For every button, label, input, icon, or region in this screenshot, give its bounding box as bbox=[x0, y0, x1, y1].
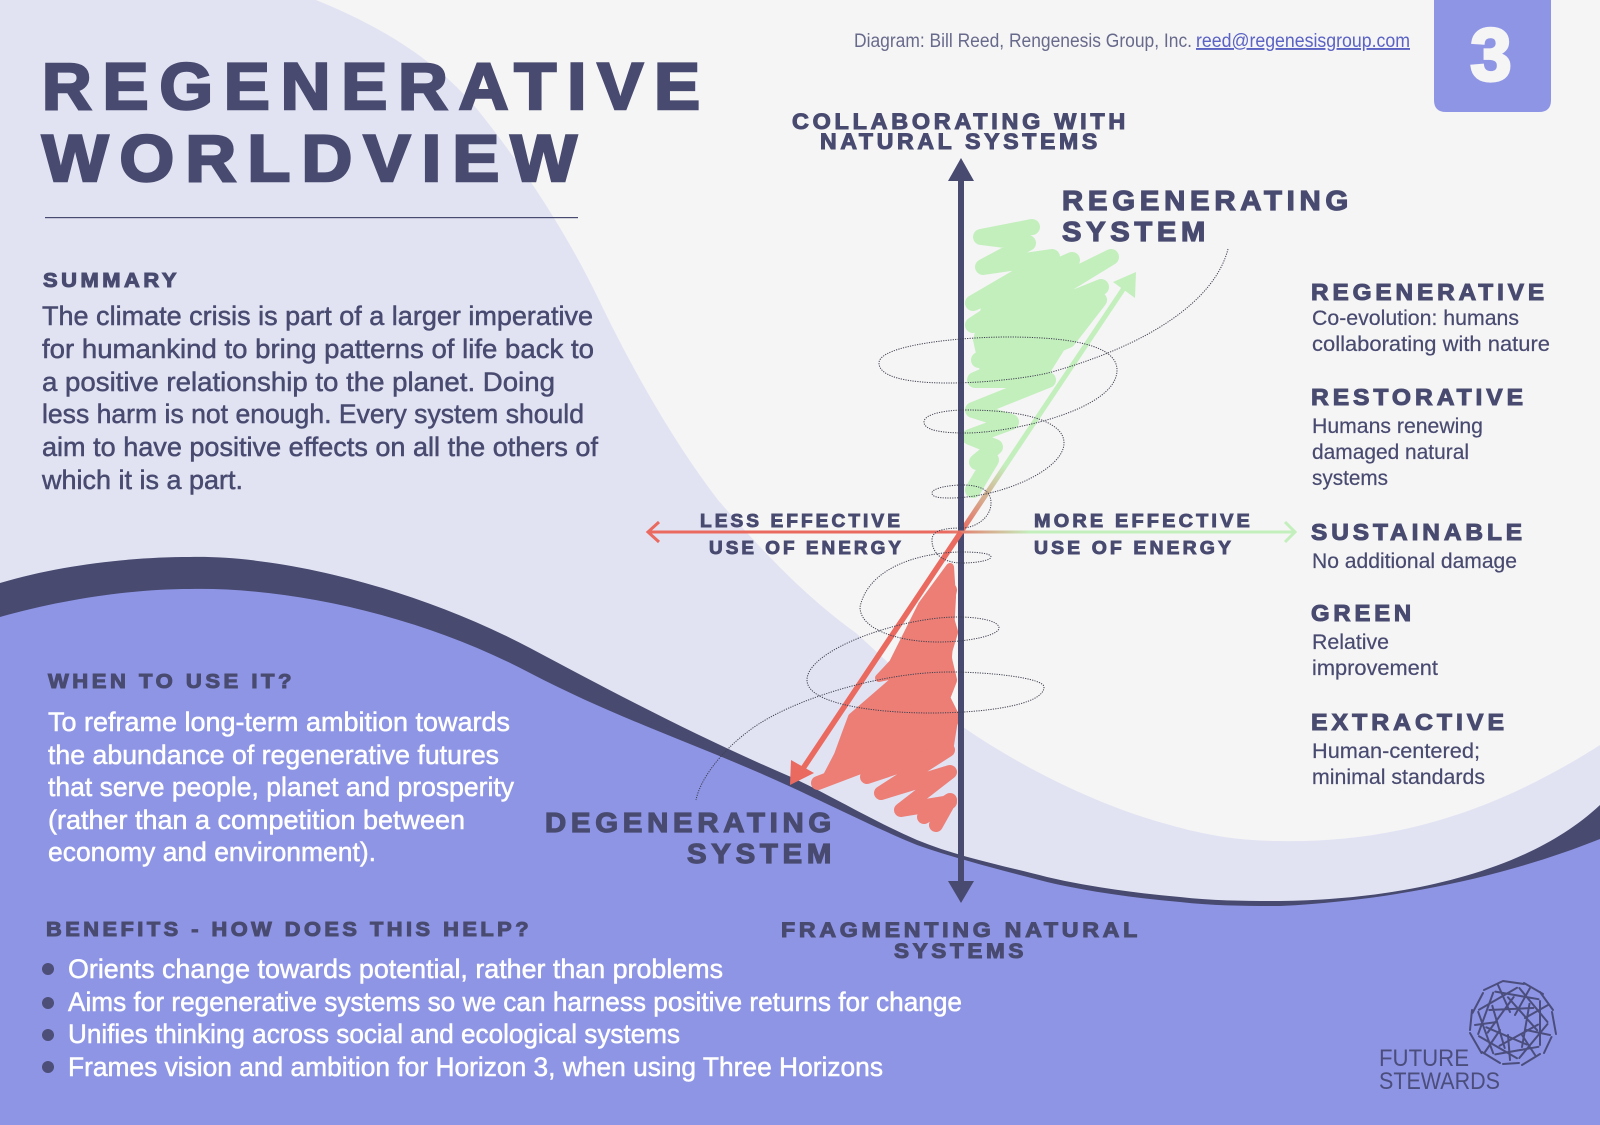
logo: future stewards bbox=[1379, 981, 1556, 1095]
logo: future stewards: STEWARDS bbox=[1379, 1068, 1500, 1095]
page number badge: 3 bbox=[1470, 13, 1512, 96]
extractive item bbox=[1311, 709, 1508, 789]
label: degenerating system bbox=[545, 807, 836, 869]
extractive item: minimal standards bbox=[1312, 766, 1485, 789]
label: less effective: USE OF ENERGY bbox=[709, 537, 904, 558]
summary text: less harm is not enough. Every system should bbox=[42, 399, 584, 429]
extractive item: EXTRACTIVE bbox=[1311, 709, 1508, 735]
summary text: aim to have positive effects on all the others of bbox=[42, 432, 598, 462]
label: regenerating system: SYSTEM bbox=[1062, 216, 1210, 247]
when to use text: that serve people, planet and prosperity bbox=[48, 772, 514, 802]
green diagonal arrow bbox=[961, 272, 1136, 532]
bullet list: Aims for regenerative systems so we can harness positive returns for change bbox=[68, 987, 962, 1017]
periwinkle lower panel bbox=[0, 589, 1600, 1125]
axis label: fragmenting: FRAGMENTING NATURAL bbox=[781, 919, 1141, 942]
regenerative item: REGENERATIVE bbox=[1311, 279, 1548, 305]
page number badge bbox=[1434, 0, 1551, 112]
dark wave band bbox=[0, 557, 1600, 1125]
summary text: The climate crisis is part of a larger imperative bbox=[42, 301, 593, 331]
label: more effective: MORE EFFECTIVE bbox=[1034, 510, 1253, 531]
summary text: for humankind to bring patterns of life back to bbox=[42, 334, 594, 364]
regenerative item: Co-evolution: humans bbox=[1312, 307, 1519, 330]
sustainable item: SUSTAINABLE bbox=[1311, 519, 1526, 545]
axis label: fragmenting bbox=[781, 919, 1141, 963]
bullet list: Unifies thinking across social and ecological systems bbox=[68, 1019, 680, 1049]
regenerative item bbox=[1311, 279, 1550, 356]
axis label: collaborating bbox=[792, 109, 1129, 154]
label: degenerating system: DEGENERATING bbox=[545, 807, 836, 838]
diagram credit: Diagram: Bill Reed, Rengenesis Group, Inc. bbox=[854, 31, 1192, 52]
restorative item: damaged natural bbox=[1312, 441, 1469, 464]
sustainable item: No additional damage bbox=[1312, 550, 1517, 573]
bullet list: Orients change towards potential, rather than problems bbox=[68, 954, 723, 984]
label: degenerating system: SYSTEM bbox=[687, 838, 836, 869]
summary heading: SUMMARY bbox=[43, 270, 180, 292]
restorative item: Humans renewing bbox=[1312, 415, 1483, 438]
label: less effective: LESS EFFECTIVE bbox=[700, 510, 903, 531]
title bbox=[42, 49, 711, 195]
horizontal axis arrow bbox=[648, 522, 1295, 542]
logo wordmark: FUTURE bbox=[1379, 1045, 1469, 1072]
when to use text: economy and environment). bbox=[48, 837, 376, 867]
title: WORLDVIEW bbox=[42, 121, 588, 195]
title underline bbox=[45, 217, 578, 218]
green item: improvement bbox=[1312, 657, 1438, 680]
green item: GREEN bbox=[1311, 600, 1415, 626]
green regenerating scribble bbox=[970, 227, 1111, 490]
when to use heading: WHEN TO USE IT? bbox=[48, 671, 295, 693]
panel: when to use it bbox=[48, 671, 514, 867]
benefits heading: BENEFITS - HOW DOES THIS HELP? bbox=[46, 919, 532, 941]
regenerative item: collaborating with nature bbox=[1312, 333, 1550, 356]
label: more effective: USE OF ENERGY bbox=[1034, 537, 1234, 558]
red degenerating scribble bbox=[818, 567, 954, 825]
when to use text: the abundance of regenerative futures bbox=[48, 740, 499, 770]
panel: benefits bbox=[42, 919, 962, 1082]
summary text: which it is a part. bbox=[41, 465, 243, 495]
red diagonal arrow bbox=[790, 532, 961, 785]
when to use text bbox=[48, 707, 514, 867]
diagram credit: reed@regenesisgroup.com bbox=[1196, 31, 1410, 52]
sustainable item bbox=[1311, 519, 1526, 573]
restorative item bbox=[1311, 384, 1527, 490]
axis label: collaborating: NATURAL SYSTEMS bbox=[820, 129, 1101, 154]
label: more effective bbox=[1034, 510, 1253, 558]
extractive item: Human-centered; bbox=[1312, 740, 1480, 763]
bullet list: Frames vision and ambition for Horizon 3, when using Three Horizons bbox=[68, 1052, 883, 1082]
bullet list bbox=[42, 954, 962, 1082]
title: REGENERATIVE bbox=[42, 49, 711, 123]
green item bbox=[1311, 600, 1438, 680]
restorative item: RESTORATIVE bbox=[1311, 384, 1527, 410]
diagram credit bbox=[854, 31, 1410, 52]
restorative item: systems bbox=[1312, 467, 1388, 490]
axis label: collaborating: COLLABORATING WITH bbox=[792, 109, 1129, 134]
label: regenerating system: REGENERATING bbox=[1062, 185, 1353, 216]
panel: spectrum list bbox=[1311, 279, 1550, 789]
green item: Relative bbox=[1312, 631, 1389, 654]
when to use text: To reframe long-term ambition towards bbox=[48, 707, 510, 737]
when to use text: (rather than a competition between bbox=[48, 805, 465, 835]
dotted spiral bbox=[696, 249, 1228, 800]
vertical axis arrow bbox=[948, 158, 974, 903]
icon: woven globe bbox=[1470, 981, 1556, 1065]
summary text: a positive relationship to the planet. Doing bbox=[42, 367, 555, 397]
label: regenerating system bbox=[1062, 185, 1353, 247]
axis label: fragmenting: SYSTEMS bbox=[894, 940, 1027, 963]
summary text bbox=[41, 301, 598, 495]
label: less effective bbox=[700, 510, 904, 558]
panel: summary bbox=[41, 270, 598, 495]
